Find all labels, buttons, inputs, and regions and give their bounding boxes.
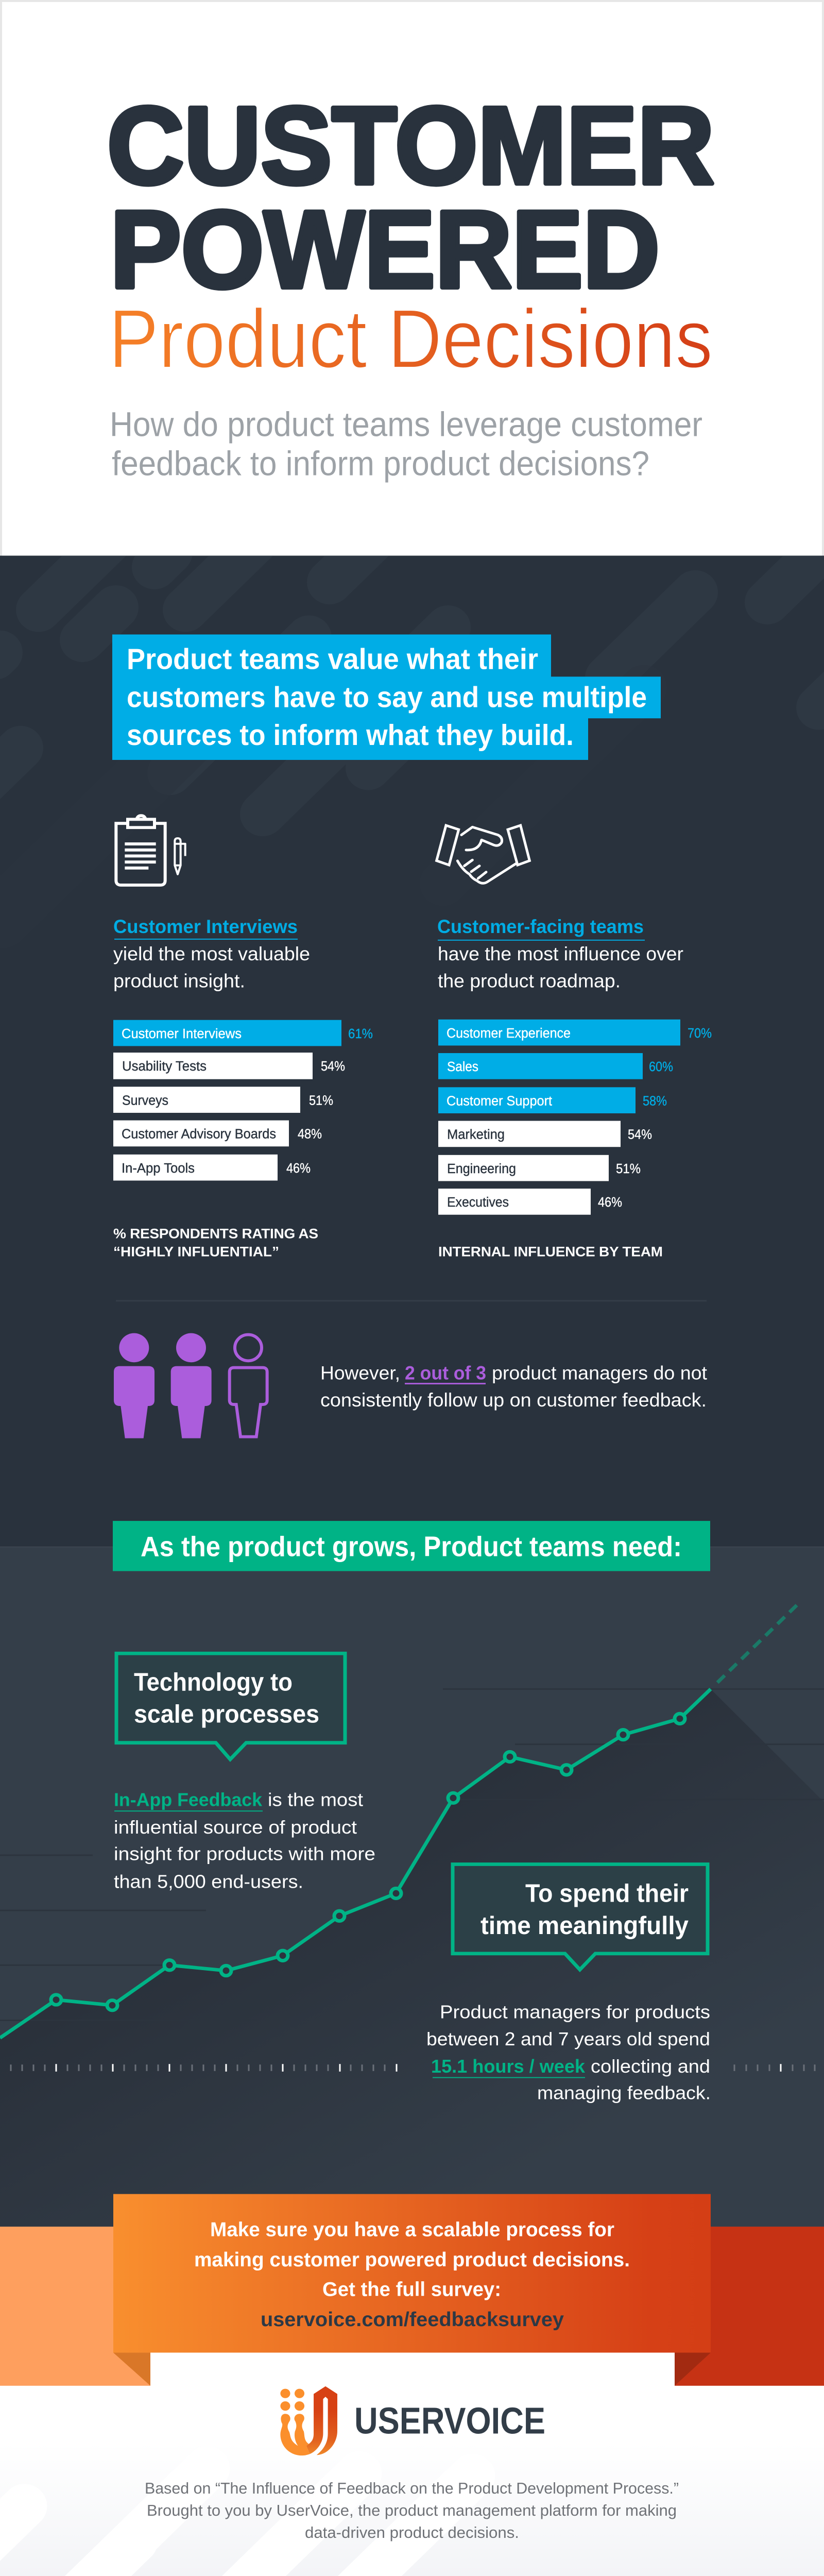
headline block xyxy=(112,634,661,760)
headline block: sources to inform what they build. xyxy=(127,719,574,752)
bar chart: valuable sources: Customer Interviews xyxy=(122,1026,242,1041)
call to action ribbon xyxy=(0,2194,824,2386)
bar chart: team influence: 51% xyxy=(616,1161,641,1176)
icon: two of three people xyxy=(114,1333,267,1438)
logo wordmark: USERVOICE xyxy=(354,2400,545,2442)
text block: customer-facing teams xyxy=(437,916,683,991)
text block: customer interviews: Customer Interviews xyxy=(113,916,298,937)
person filled xyxy=(114,1333,154,1438)
text block: follow up statistic xyxy=(320,1362,708,1411)
text block: in-app feedback: In-App Feedback xyxy=(114,1789,263,1810)
ribbon front xyxy=(113,2194,711,2352)
ribbon text: making customer powered product decisions. xyxy=(194,2248,630,2271)
chart caption: respondents xyxy=(113,1226,318,1260)
text block: hours per week: collecting and xyxy=(591,2056,710,2077)
bar chart: team influence: 70% xyxy=(688,1025,712,1041)
title line: product decisions: Product Decisions xyxy=(109,292,713,385)
bar chart: team influence xyxy=(438,1020,712,1215)
icon: handshake xyxy=(437,825,529,883)
subtitle: feedback to inform product decisions? xyxy=(112,444,649,483)
text block: in-app feedback xyxy=(114,1789,375,1892)
text block: in-app feedback: influential source of product xyxy=(114,1817,357,1838)
bar chart: team influence: Customer Support xyxy=(447,1093,553,1108)
title line: powered: POWERED xyxy=(110,188,660,311)
callout: technology: scale processes xyxy=(134,1700,319,1728)
text block: in-app feedback: insight for products with more xyxy=(114,1843,375,1865)
bar chart: valuable sources: 46% xyxy=(286,1160,311,1176)
text block: in-app feedback: is the most xyxy=(268,1789,363,1810)
text block: in-app feedback: than 5,000 end-users. xyxy=(114,1871,303,1892)
bar chart: valuable sources: 61% xyxy=(348,1026,373,1041)
ribbon fold right xyxy=(675,2352,711,2386)
headline block: Product teams value what their xyxy=(127,643,538,676)
text block: follow up statistic: However, xyxy=(320,1362,400,1383)
callout: time: time meaningfully xyxy=(480,1911,689,1940)
person filled xyxy=(171,1333,212,1438)
footnote: Brought to you by UserVoice, the product management platform for making xyxy=(147,2502,677,2519)
text block: customer-facing teams: the product roadmap. xyxy=(438,970,621,991)
text block: customer-facing teams: have the most influence over xyxy=(438,943,683,964)
ribbon side left xyxy=(0,2227,150,2386)
bar chart: valuable sources: 54% xyxy=(321,1058,345,1074)
person outlined xyxy=(230,1335,267,1437)
text block: hours per week: 15.1 hours / week xyxy=(431,2056,586,2077)
icon: clipboard and pen xyxy=(116,816,185,885)
bar chart: team influence: Engineering xyxy=(447,1161,516,1176)
ribbon text: Get the full survey: xyxy=(322,2278,501,2300)
chart caption: respondents: “HIGHLY INFLUENTIAL” xyxy=(113,1244,279,1260)
text block: customer interviews xyxy=(113,916,310,991)
logo mark xyxy=(280,2386,337,2455)
title line: customer: CUSTOMER xyxy=(107,84,714,207)
chart caption: respondents: % RESPONDENTS RATING AS xyxy=(113,1226,318,1241)
bar chart: valuable sources: 51% xyxy=(309,1093,333,1108)
chart caption: internal influence: INTERNAL INFLUENCE BY TEAM xyxy=(438,1244,663,1260)
bar chart: team influence: Sales xyxy=(447,1059,478,1074)
section heading: product teams need xyxy=(113,1521,710,1571)
subtitle xyxy=(110,405,702,483)
bar chart: valuable sources: Customer Advisory Boards xyxy=(122,1126,276,1142)
text block: hours per week: Product managers for products xyxy=(440,2002,710,2022)
text block: follow up statistic: 2 out of 3 xyxy=(405,1362,486,1383)
callout: time xyxy=(453,1864,708,1970)
text block: follow up statistic: consistently follow up on customer feedback. xyxy=(320,1389,707,1411)
panel: customer feedback sources xyxy=(0,522,824,1547)
headline block: customers have to say and use multiple xyxy=(127,681,647,714)
ribbon side right xyxy=(675,2227,824,2386)
bar chart: valuable sources: 48% xyxy=(298,1126,322,1142)
bar chart: valuable sources: Usability Tests xyxy=(122,1058,207,1074)
bar chart: team influence: Executives xyxy=(447,1194,509,1210)
callout: time: To spend their xyxy=(525,1879,689,1907)
section heading: product teams need: As the product grows, Product teams need: xyxy=(141,1531,682,1562)
line chart xyxy=(0,1603,799,2038)
text block: customer interviews: yield the most valuable xyxy=(113,943,310,964)
ribbon text: Make sure you have a scalable process for xyxy=(210,2218,614,2241)
bar chart: team influence: 54% xyxy=(628,1127,652,1142)
callout: technology xyxy=(116,1653,345,1759)
text block: follow up statistic: product managers do not xyxy=(492,1362,708,1383)
bar chart: valuable sources: Surveys xyxy=(122,1093,168,1108)
ribbon text xyxy=(194,2218,630,2331)
footnote: Based on “The Influence of Feedback on the Product Development Process.” xyxy=(145,2480,679,2497)
callout: technology: Technology to xyxy=(134,1668,293,1696)
text block: hours per week: managing feedback. xyxy=(537,2082,711,2103)
text block: customer-facing teams: Customer-facing teams xyxy=(437,916,644,937)
bar chart: team influence: Customer Experience xyxy=(447,1025,571,1041)
title xyxy=(107,84,714,385)
logo: uservoice xyxy=(280,2386,545,2455)
bar chart: team influence: 46% xyxy=(598,1194,622,1210)
bar chart: team influence: 60% xyxy=(649,1059,673,1074)
footnote: data-driven product decisions. xyxy=(305,2524,519,2541)
footnote xyxy=(145,2480,679,2541)
footer background xyxy=(0,2386,824,2576)
text block: hours per week xyxy=(426,2002,711,2103)
ribbon text: uservoice.com/feedbacksurvey xyxy=(261,2308,564,2331)
text block: hours per week: between 2 and 7 years old spend xyxy=(426,2029,710,2049)
bar chart: valuable sources xyxy=(113,1020,373,1181)
text block: customer interviews: product insight. xyxy=(113,970,245,991)
ribbon fold left xyxy=(113,2352,150,2386)
axis ticks xyxy=(11,2064,815,2072)
bar chart: team influence: 58% xyxy=(643,1093,667,1108)
bar chart: valuable sources: In-App Tools xyxy=(122,1160,195,1176)
panel: growth chart xyxy=(0,1521,824,2227)
subtitle: How do product teams leverage customer xyxy=(110,405,702,444)
bar chart: team influence: Marketing xyxy=(447,1127,505,1142)
